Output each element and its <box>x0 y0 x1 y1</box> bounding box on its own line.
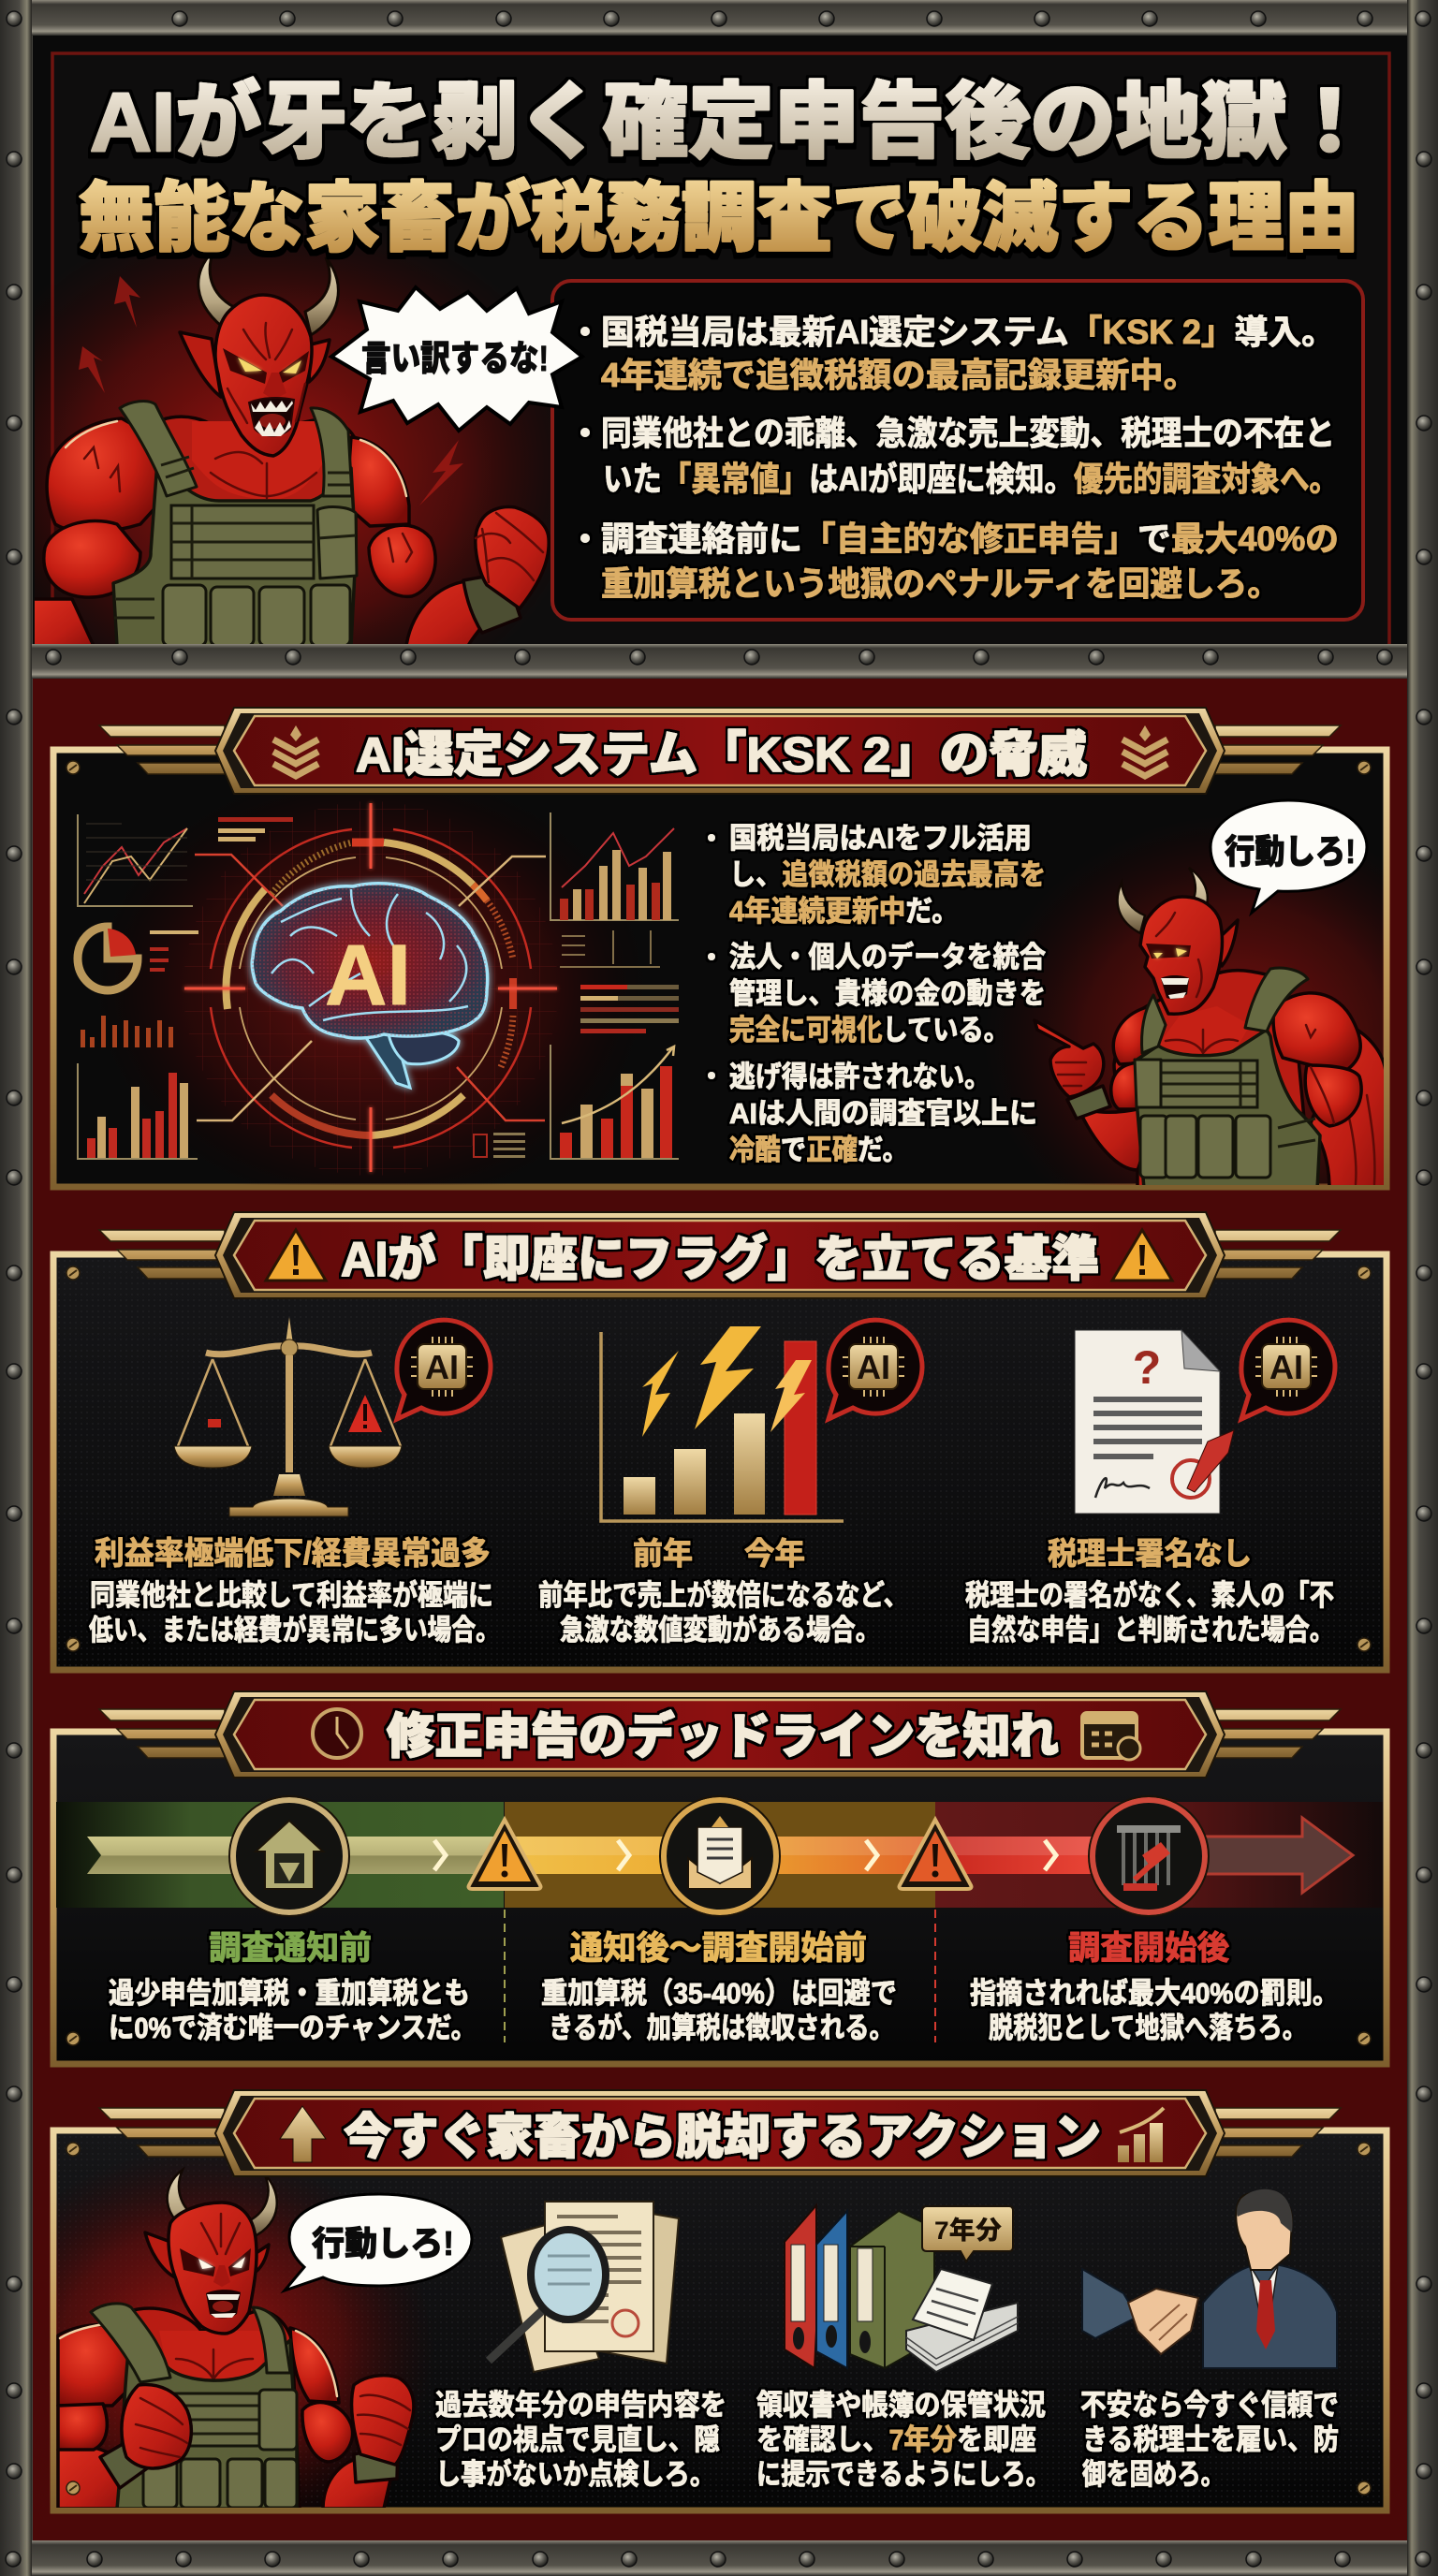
red section background <box>33 679 1407 2540</box>
legend chip <box>474 1133 525 1158</box>
label: seven years: 7年分 <box>934 2217 1002 2245</box>
stage descriptions: に0%で済む唯一のチャンスだ。 <box>109 2012 477 2044</box>
chart: top-right bars <box>550 812 679 920</box>
icon: balance scale <box>174 1317 402 1516</box>
character: shouting devil <box>35 235 550 644</box>
panel: AI flags <box>53 1212 1387 1670</box>
speech bubble: 行動しろ! <box>312 2224 454 2262</box>
icon: surge bar chart <box>601 1326 844 1521</box>
title: AIが牙を剥く確定申告後の地獄！ <box>90 75 1372 168</box>
criteria descriptions: 税理士の署名がなく、素人の「不 <box>965 1579 1334 1612</box>
criteria labels: 利益率極端低下/経費異常過多 <box>95 1536 491 1572</box>
icon: gavel and bars <box>1089 1796 1209 1916</box>
pointing hand <box>1034 1020 1110 1119</box>
action descriptions: プロの視点で見直し、隠 <box>435 2423 720 2456</box>
criteria descriptions: 同業他社と比較して利益率が極端に <box>90 1579 493 1612</box>
HUD brain graphic <box>184 803 557 1172</box>
stage titles: 通知後〜調査開始前 <box>570 1930 867 1967</box>
banner: KSK 2: AI選定システム「KSK 2」の脅威 <box>356 728 1087 783</box>
criteria descriptions: 低い、または経費が異常に多い場合。 <box>89 1614 500 1647</box>
icon: AI badge: AI <box>425 1348 459 1386</box>
stage descriptions: 重加算税（35-40%）は回避で <box>541 1977 897 2010</box>
action descriptions: きる税理士を雇い、防 <box>1082 2423 1339 2456</box>
stage titles: 調査通知前 <box>209 1930 372 1967</box>
speech bubble <box>285 2194 472 2291</box>
panel: deadline timeline <box>53 1691 1387 2064</box>
criteria descriptions: 前年比で売上が数倍になるなど、 <box>538 1579 908 1612</box>
icon: calendar <box>1082 1713 1140 1760</box>
bullets text: 国税当局は最新AI選定システム「KSK 2」導入。 <box>601 313 1335 351</box>
KSK bullets: 国税当局はAIをフル活用 <box>729 822 1032 855</box>
KSK bullets: 4年連続更新中だ。 <box>729 895 959 928</box>
clenched fist <box>463 507 549 633</box>
icon: rank chevrons <box>273 725 1167 776</box>
title: 無能な家畜が税務調査で破滅する理由 <box>79 177 1359 261</box>
icon: warning triangles <box>266 1230 1172 1281</box>
devil vest <box>113 402 357 646</box>
character: pointing devil <box>1034 868 1389 1189</box>
warning marker <box>899 1820 972 1889</box>
banner: actions: 今すぐ家畜から脱却するアクション <box>344 2111 1101 2165</box>
chart: bottom-left bars <box>78 1063 198 1159</box>
action descriptions: を確認し、7年分を即座 <box>756 2423 1036 2456</box>
bullets text: 同業他社との乖離、急激な売上変動、税理士の不在と <box>601 414 1335 452</box>
KSK bullets: 法人・個人のデータを統合 <box>729 941 1046 973</box>
action descriptions: 不安なら今すぐ信頼で <box>1080 2389 1339 2422</box>
icon: AI badge <box>829 1320 922 1419</box>
stage descriptions <box>109 1977 1339 2044</box>
warning marker <box>468 1820 541 1889</box>
character: devil with fists <box>56 2166 416 2508</box>
icon: documents under magnifier <box>489 2202 679 2372</box>
stage titles: 調査開始後 <box>1068 1930 1229 1967</box>
banner: deadline <box>99 1691 1341 1778</box>
chart: mini bars <box>218 817 293 842</box>
devil head <box>180 251 338 456</box>
bullets text: 4年連続で追徴税額の最高記録更新中。 <box>601 356 1197 394</box>
criteria labels <box>95 1536 1252 1572</box>
devil head <box>1118 868 1238 1014</box>
devil backdrop glow <box>90 764 1438 1264</box>
criteria labels: 税理士署名なし <box>1048 1536 1252 1571</box>
speech bubble: 行動しろ! <box>1225 832 1356 871</box>
icon: up arrow <box>280 2106 326 2162</box>
speech bubble <box>1211 800 1367 913</box>
bullets text: 調査連絡前に「自主的な修正申告」で最大40%の <box>601 520 1339 558</box>
bullets text: 重加算税という地獄のペナルティを回避しろ。 <box>601 564 1280 603</box>
speech burst <box>331 287 582 431</box>
action descriptions: し事がないか点検しろ。 <box>435 2458 715 2491</box>
KSK bullets: 管理し、貴様の金の動きを <box>729 977 1046 1010</box>
icon: unsigned document <box>1075 1330 1234 1514</box>
criteria descriptions: 急激な数値変動がある場合。 <box>560 1614 880 1647</box>
timeline arrow <box>87 1818 1353 1893</box>
stage titles <box>209 1930 1229 1967</box>
stage descriptions: 指摘されれば最大40%の罰則。 <box>970 1977 1339 2010</box>
timeline bands <box>56 1802 1383 1908</box>
panel: KSK 2 threat <box>51 707 1389 1191</box>
banner: actions <box>99 2090 1341 2176</box>
devil vest <box>1135 968 1320 1189</box>
stage descriptions: 過少申告加算税・重加算税とも <box>109 1977 470 2010</box>
icon: growth bars <box>1118 2108 1164 2162</box>
screws <box>66 761 1371 774</box>
label: seven years <box>922 2206 1013 2261</box>
devil head <box>145 2170 277 2334</box>
stage descriptions: きるが、加算税は徴収される。 <box>549 2012 894 2044</box>
icon: unsigned document: ? <box>1133 1341 1161 1394</box>
chart: top-left line chart <box>78 814 193 906</box>
KSK bullets: 冷酷で正確だ。 <box>729 1134 908 1166</box>
icon: AI badge <box>1241 1320 1335 1419</box>
chart: bottom-right rising bars <box>550 1045 679 1159</box>
chart: pie <box>78 927 198 990</box>
icon: AI badge: AI <box>857 1348 890 1386</box>
KSK bullets <box>708 822 1046 1166</box>
title <box>79 75 1372 261</box>
chart: right horizontal bars <box>580 985 679 1033</box>
KSK bullets: 逃げ得は許されない。 <box>729 1061 990 1093</box>
KSK bullets: 完全に可視化している。 <box>729 1014 1009 1046</box>
criteria labels: 今年 <box>744 1536 805 1571</box>
chart: small bars <box>81 1016 173 1047</box>
icon: binders and paper stack <box>785 2205 1018 2372</box>
criteria descriptions: 自然な申告」と判断された場合。 <box>967 1614 1334 1647</box>
action descriptions: に提示できるようにしろ。 <box>756 2458 1050 2491</box>
banner: AI flag criteria <box>99 1212 1341 1298</box>
bullets text: いた「異常値」はAIが即座に検知。優先的調査対象へ。 <box>603 460 1339 498</box>
banner: deadline: 修正申告のデッドラインを知れ <box>387 1709 1059 1764</box>
icon: AI badge <box>397 1320 491 1419</box>
icon: envelope <box>660 1796 780 1916</box>
HUD brain graphic: AI <box>325 928 411 1023</box>
stage divider lines <box>505 1910 935 2042</box>
icon: safe house <box>229 1796 349 1916</box>
speech burst: 言い訳するな! <box>361 340 549 379</box>
icon: clock <box>313 1709 361 1758</box>
criteria descriptions <box>89 1579 1334 1647</box>
panel: actions <box>51 2089 1389 2514</box>
icon: handshake with tax accountant <box>1082 2189 1337 2368</box>
icon: AI badge: AI <box>1269 1348 1303 1386</box>
action descriptions <box>435 2389 1339 2491</box>
action descriptions: 領収書や帳簿の保管状況 <box>756 2389 1046 2422</box>
bullets text <box>580 313 1339 603</box>
criteria labels: 前年 <box>633 1536 693 1571</box>
panel: header <box>35 51 1391 644</box>
devil vest <box>91 2304 297 2509</box>
KSK bullets: し、追徴税額の過去最高を <box>729 858 1046 891</box>
stage descriptions: 脱税犯として地獄へ落ちろ。 <box>989 2012 1307 2044</box>
KSK bullets: AIは人間の調査官以上に <box>729 1097 1037 1130</box>
banner: KSK 2 <box>99 708 1341 794</box>
action descriptions: 過去数年分の申告内容を <box>435 2389 726 2422</box>
clenched fists <box>100 2376 414 2488</box>
chart: right mini marks <box>560 930 660 967</box>
banner: AI flag criteria: AIが「即座にフラグ」を立てる基準 <box>341 1232 1099 1287</box>
action descriptions: 御を固めろ。 <box>1082 2458 1225 2491</box>
bullet box <box>552 281 1363 620</box>
